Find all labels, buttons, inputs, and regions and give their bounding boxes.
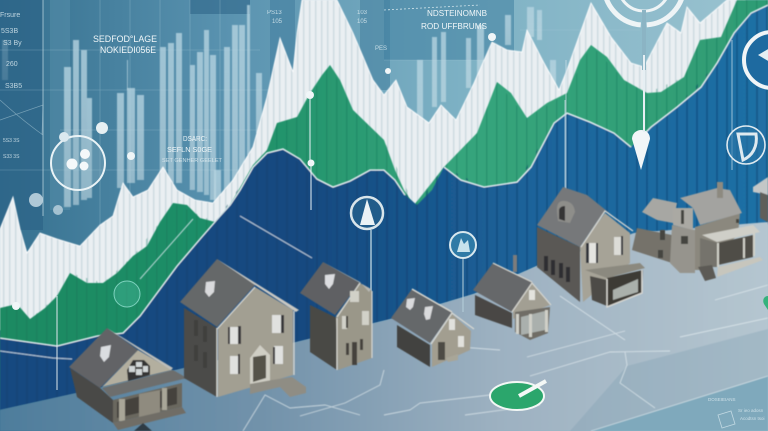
icon: shield ring [727, 126, 765, 164]
area chart: white series [0, 0, 745, 330]
text block: left axis values: Frsure [0, 12, 20, 19]
text block: left axis values: 5S3B [1, 28, 18, 35]
icon: teal ring on green area [114, 281, 140, 307]
icon: map pin [632, 130, 650, 170]
bar chart: background columns [2, 5, 556, 215]
house 2: two-storey with stairs [180, 259, 306, 397]
ground: map surface [0, 222, 768, 431]
icon: concentric target top right [604, 0, 684, 70]
text block: left axis values: S3B5 [5, 83, 22, 90]
text block: centre-left caption [162, 134, 222, 164]
text block: top small labels: 105 [357, 19, 368, 25]
house 3: narrow townhouse [300, 262, 372, 370]
callout: small chart nodes [12, 33, 732, 390]
text block: top small labels: PS13 [267, 10, 282, 16]
text block: centre-left caption: SEFLN S0GE [167, 145, 212, 154]
text block: top small labels: 103 [357, 10, 368, 16]
text block: left axis values [0, 12, 22, 160]
house 1: porch cottage [69, 328, 187, 431]
callout: ring with three nodes [29, 122, 135, 215]
heading: centre chart label: ROD UFFBRUMS [421, 21, 487, 31]
text block: left axis values: S33 3S [3, 154, 20, 160]
house 5: cottage with chimney [473, 255, 551, 340]
house 7: turreted house [632, 177, 768, 281]
heading: left chart label: NOKIEDI056E [100, 45, 156, 56]
text block: bottom-right document: DOSEIEIANS [708, 397, 736, 402]
text block: top small labels: PES [375, 46, 387, 52]
text block: top small labels [267, 10, 387, 52]
text block: top small labels: 105 [272, 19, 283, 25]
text block: bottom-right document: Sr ieo adosn [738, 408, 764, 413]
icon: ring with arrowhead [351, 197, 383, 300]
icon: ring with flame [450, 232, 476, 312]
text block: left axis values: 5S3 3S [3, 138, 20, 144]
heading: left chart label: SEDFOD°LAGE [93, 34, 157, 45]
icon: green disc with check [490, 381, 546, 410]
house 6: large house with porch [537, 187, 645, 307]
text block: bottom-right document [708, 397, 765, 428]
text block: centre-left caption: DSARC: [183, 134, 207, 143]
text block: left axis values: 260 [6, 61, 18, 68]
text block: bottom-right document: Acodtsn tsoi [740, 416, 765, 421]
text block: left axis values: S3 By [3, 40, 22, 47]
icon: green marker at right [763, 296, 768, 310]
heading: left chart label [93, 34, 157, 56]
house 4: small cottage [391, 289, 474, 367]
icon: pin stem [643, 55, 645, 132]
icon: ring at right edge [744, 32, 768, 88]
heading: centre chart label: NDSTEINOMNB [427, 8, 487, 18]
heading: centre chart label [421, 8, 487, 31]
text block: centre-left caption: SET GENHER GEELET [162, 158, 222, 164]
